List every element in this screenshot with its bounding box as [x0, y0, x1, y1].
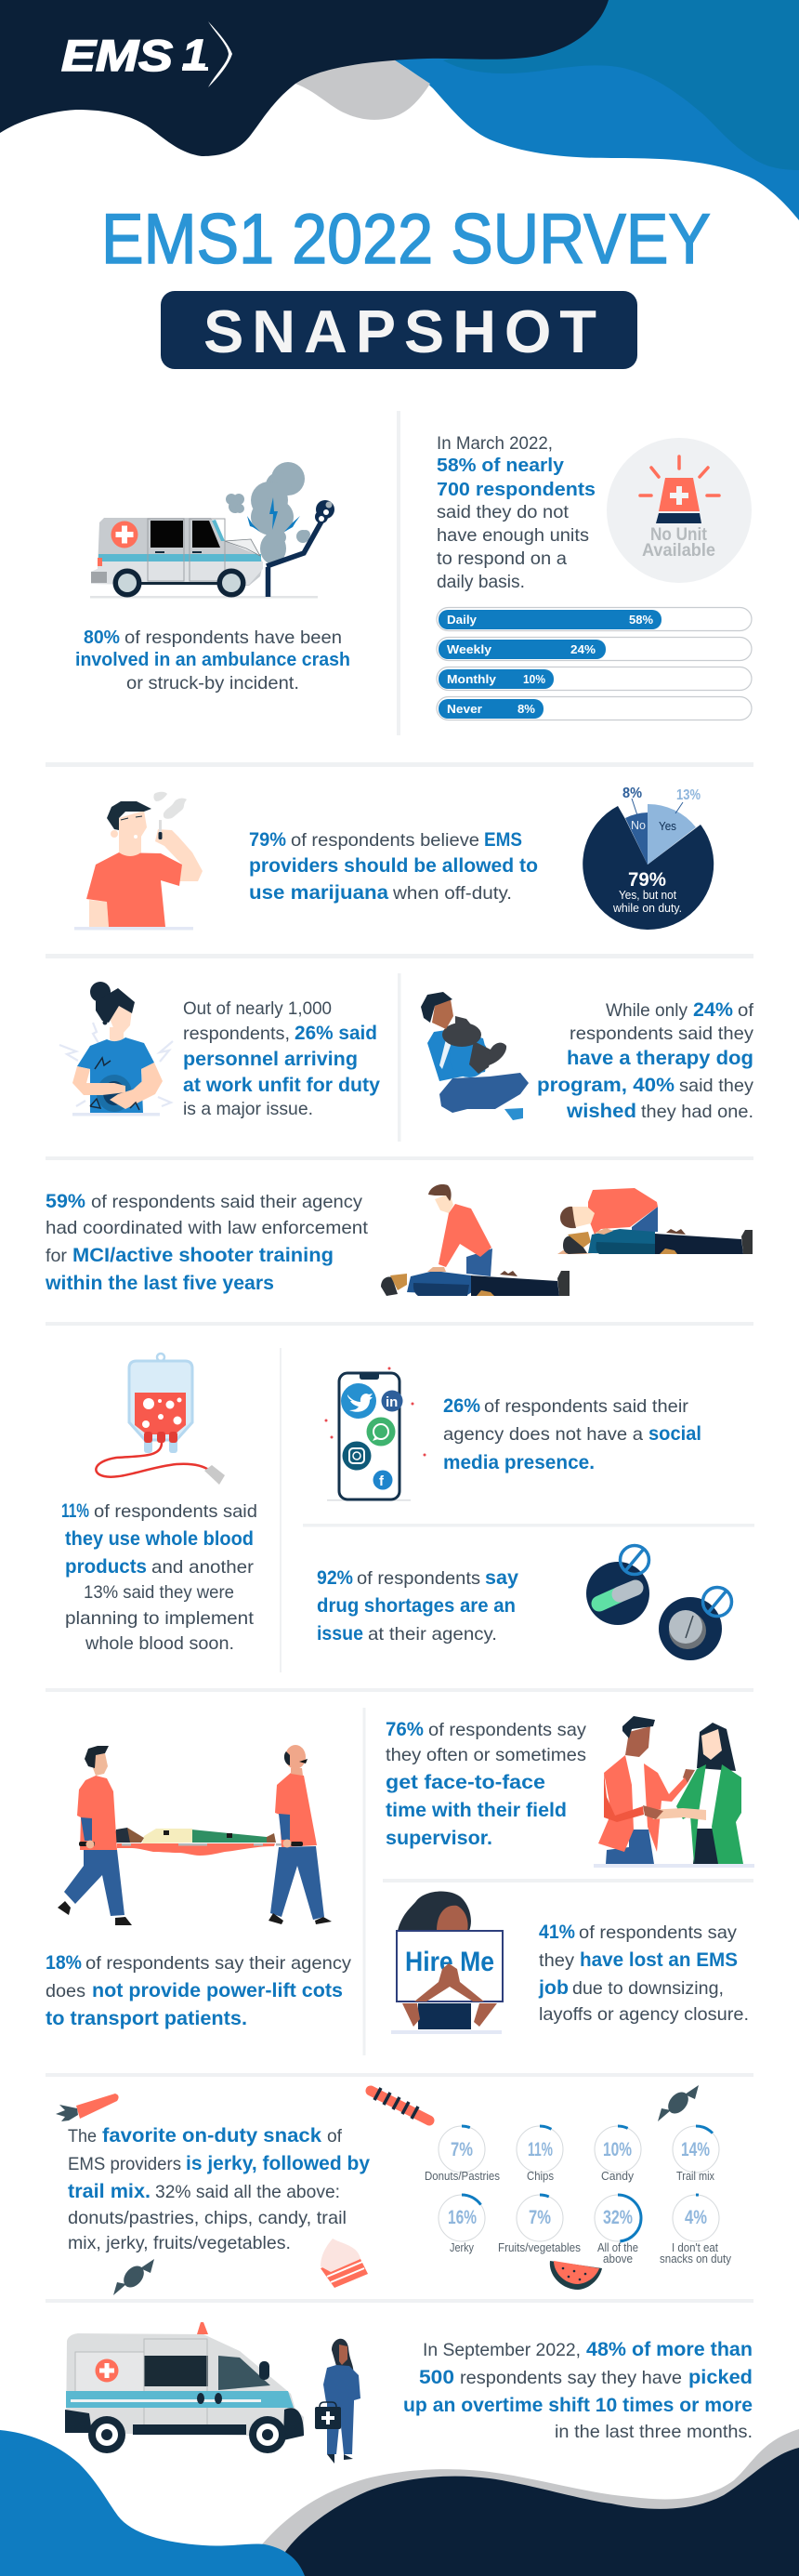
ring chart: snack percentages: 4%	[685, 2207, 707, 2228]
text: 26% social media: of respondents said their	[484, 1396, 689, 1417]
text: favorite on-duty snack: mix, jerky, fruits/vegetables.	[68, 2233, 291, 2253]
ring chart: snack percentages: 10%	[603, 2139, 632, 2160]
text: 26% social media: agency does not have a	[443, 1424, 643, 1445]
text: 59% training: had coordinated with law enforcement	[46, 1218, 369, 1238]
text: 18% power-lift cots: does	[46, 1981, 85, 2001]
icon: handshake between man and woman	[594, 1716, 754, 1868]
icon: siren no unit available	[607, 438, 752, 583]
text: 79% marijuana	[249, 828, 538, 904]
text: 58% not enough units: 58% of nearly	[437, 455, 565, 476]
ring chart: snack percentages	[425, 2126, 731, 2266]
ring chart: snack percentages: Chips	[527, 2169, 554, 2183]
text: 26% unfit for duty: at work unfit for duty	[183, 1074, 380, 1096]
ring chart: snack percentages: 32%	[603, 2207, 633, 2228]
icon: wrapped candy small	[113, 2259, 154, 2295]
text: 48% overtime: 48% of more than	[586, 2338, 753, 2360]
pie chart: marijuana opinions: 79%	[628, 869, 666, 891]
ring chart: snack percentages: 14%	[681, 2139, 710, 2160]
logo: EMS1	[61, 21, 232, 87]
text: 59% training: 59%	[46, 1190, 85, 1212]
bar: monthly: 10%	[523, 672, 545, 686]
pie chart: marijuana opinions	[583, 786, 714, 930]
text: favorite on-duty snack: donuts/pastries, chips, candy, trail	[68, 2208, 347, 2228]
icon: CPR chest compressions	[381, 1184, 570, 1296]
text: 92% drug shortages: 92%	[317, 1566, 353, 1589]
ring chart: snack percentages: Candy	[601, 2169, 634, 2183]
icon: woman with stomach ache	[59, 982, 173, 1116]
bar: weekly: Weekly	[447, 642, 492, 656]
text: 18% power-lift cots: to transport patients.	[46, 2007, 247, 2029]
icon: stretcher carried by two medics	[58, 1745, 332, 1925]
text: 11% whole blood: whole blood soon.	[85, 1633, 234, 1654]
icon: cake slice	[321, 2239, 368, 2288]
text: 11% whole blood: of respondents said	[94, 1501, 257, 1522]
text: 24% therapy dog: of	[738, 1000, 754, 1021]
text: favorite on-duty snack: is jerky, followed by	[186, 2152, 370, 2174]
icon: CPR rescue breaths	[557, 1188, 753, 1254]
icon: person smoking	[74, 792, 203, 930]
text: 11% whole blood: and another	[151, 1557, 255, 1578]
bar: daily: Daily	[447, 613, 478, 627]
text: 58% not enough units	[437, 434, 596, 592]
text: 79% marijuana: of respondents believe	[291, 830, 479, 851]
header wave background	[0, 0, 799, 220]
text: 48% overtime: respondents say they have	[460, 2368, 682, 2388]
text: 59% training	[45, 1190, 369, 1294]
text: 92% drug shortages: drug shortages are an	[317, 1594, 516, 1617]
text: 48% overtime: In September 2022,	[423, 2340, 581, 2360]
text: 24% therapy dog: 24%	[693, 998, 733, 1021]
text: 79% marijuana: EMS	[484, 828, 522, 851]
ring chart: snack percentages: 7%	[451, 2139, 473, 2160]
text: 48% overtime: 500	[419, 2366, 454, 2388]
panel: favorite snacks	[56, 2085, 731, 2295]
text: 24% therapy dog: wished	[566, 1100, 636, 1122]
text: 24% therapy dog: program, 40%	[537, 1074, 675, 1096]
panel: ambulance crash	[75, 462, 350, 694]
icon: hire me sign: Hire Me	[405, 1947, 494, 1977]
text: 58% not enough units: to respond on a	[437, 549, 567, 569]
text: 26% unfit for duty: is a major issue.	[183, 1099, 313, 1119]
text: 76% face-to-face: of respondents say	[428, 1720, 586, 1740]
text: 79% marijuana: use marijuana	[249, 881, 389, 904]
text: 41% lost job	[538, 1921, 749, 2025]
ring chart: snack percentages: Trail mix	[676, 2169, 714, 2183]
icon: capsule unavailable	[586, 1545, 649, 1625]
icon: siren no unit available: Available	[642, 541, 715, 561]
text: 92% drug shortages: say	[485, 1566, 518, 1589]
text: 92% drug shortages: issue	[317, 1622, 363, 1645]
text: 26% unfit for duty: personnel arriving	[183, 1048, 358, 1070]
pie chart: marijuana opinions: 13%	[676, 787, 701, 803]
icon: carrot	[56, 2094, 119, 2121]
panel: lost EMS job	[391, 1892, 749, 2034]
text: 41% lost job: layoffs or agency closure.	[539, 2004, 749, 2025]
text: favorite on-duty snack: The	[68, 2126, 97, 2147]
text: 11% whole blood: 11%	[61, 1499, 89, 1522]
icon: person hugging dog	[421, 992, 529, 1120]
icon: ambulance	[65, 2322, 304, 2453]
text: favorite on-duty snack: of	[327, 2126, 343, 2147]
icon: siren no unit available: No Unit	[650, 525, 708, 545]
text: 59% training: MCI/active shooter training	[72, 1244, 334, 1266]
panel: active shooter training	[45, 1184, 753, 1296]
text: 80% involved in a crash: of respondents have been	[124, 628, 342, 648]
panel: social media	[325, 1367, 701, 1500]
text: 59% training: of respondents said their agency	[91, 1192, 362, 1212]
text: 41% lost job: have lost an EMS	[580, 1949, 738, 1971]
text: 41% lost job: they	[539, 1950, 574, 1971]
subtitle badge: snapshot: SNAPSHOT	[203, 297, 596, 365]
text: favorite on-duty snack: favorite on-duty snack	[102, 2124, 321, 2147]
logo: EMS1: EMS	[61, 31, 173, 80]
text: 59% training: within the last five years	[45, 1272, 274, 1294]
text: 59% training: for	[46, 1246, 68, 1266]
panel: therapy dog	[421, 992, 754, 1122]
text: 80% involved in a crash	[75, 627, 350, 694]
text: 24% therapy dog: While only	[606, 1000, 688, 1021]
icon: watermelon slice	[550, 2261, 602, 2290]
text: 76% face-to-face: supervisor.	[386, 1827, 492, 1849]
text: 11% whole blood	[61, 1499, 257, 1654]
text: 79% marijuana: providers should be allowed to	[249, 854, 538, 877]
bar: daily: 58%	[629, 613, 653, 627]
ring chart: snack percentages: Jerky	[450, 2240, 474, 2254]
bar: never	[437, 697, 752, 720]
icon: crashed ambulance	[90, 462, 334, 599]
text: 18% power-lift cots: 18%	[46, 1951, 82, 1974]
text: 92% drug shortages: at their agency.	[368, 1624, 497, 1645]
panel: no unit available	[437, 434, 752, 720]
text: 11% whole blood: products	[65, 1555, 147, 1578]
text: 24% therapy dog: respondents said they	[570, 1024, 753, 1044]
text: 48% overtime: up an overtime shift 10 times or more	[403, 2394, 753, 2416]
ring chart: snack percentages: above	[603, 2252, 633, 2266]
icon: medic with bag	[315, 2339, 360, 2464]
bar: monthly	[437, 667, 752, 690]
text: 48% overtime: picked	[688, 2366, 753, 2388]
text: 76% face-to-face: 76%	[386, 1718, 424, 1740]
text: 26% unfit for duty: Out of nearly 1,000	[183, 998, 332, 1019]
text: 41% lost job: of respondents say	[579, 1922, 737, 1943]
bar: never: 8%	[517, 702, 535, 716]
ring chart: snack percentages: 7%	[529, 2207, 551, 2228]
icon: wrapped candy	[658, 2085, 699, 2121]
text: 18% power-lift cots: not provide power-lift cots	[92, 1979, 343, 2001]
icon: hire me sign	[391, 1892, 503, 2034]
text: 11% whole blood: planning to implement	[65, 1608, 255, 1629]
text: 48% overtime: in the last three months.	[555, 2422, 753, 2442]
text: favorite on-duty snack: 32% said all the above:	[155, 2182, 340, 2202]
icon: phone with social apps: f	[379, 1473, 385, 1489]
text: 26% social media: media presence.	[443, 1451, 595, 1473]
text: 26% social media: social	[648, 1422, 701, 1445]
text: 76% face-to-face: they often or sometimes	[386, 1745, 586, 1765]
text: favorite on-duty snack: trail mix.	[68, 2180, 151, 2202]
pie chart: marijuana opinions: Yes, but not	[619, 889, 676, 902]
text: 11% whole blood: they use whole blood	[65, 1527, 254, 1550]
ring chart: snack percentages: I don't eat	[672, 2240, 718, 2254]
pie chart: marijuana opinions: 8%	[622, 786, 642, 801]
text: 24% therapy dog: have a therapy dog	[567, 1047, 753, 1069]
text: 18% power-lift cots	[46, 1951, 351, 2029]
panel: drug shortages	[317, 1545, 732, 1660]
text: 48% overtime	[403, 2338, 753, 2442]
text: 11% whole blood: 13% said they were	[84, 1582, 234, 1603]
text: 26% unfit for duty	[183, 998, 380, 1119]
icon: IV blood bag	[96, 1354, 225, 1485]
footer wave background	[0, 2429, 799, 2576]
ring chart: snack percentages: 11%	[528, 2139, 553, 2160]
panel: marijuana	[74, 786, 714, 930]
text: 58% not enough units: daily basis.	[437, 573, 525, 592]
text: 80% involved in a crash: involved in an ambulance crash	[75, 649, 350, 670]
ring chart: snack percentages: 16%	[448, 2207, 477, 2228]
text: favorite on-duty snack	[68, 2124, 370, 2253]
icon: phone with social apps: in	[386, 1394, 398, 1410]
icon: candy stick	[371, 2088, 429, 2120]
pie chart: marijuana opinions: Yes	[659, 819, 676, 833]
text: 76% face-to-face: time with their field	[386, 1799, 567, 1821]
text: 58% not enough units: have enough units	[437, 526, 589, 546]
panel: whole blood	[61, 1354, 257, 1654]
ring chart: snack percentages: snacks on duty	[660, 2252, 731, 2266]
pie chart: marijuana opinions: No	[631, 818, 646, 832]
text: 80% involved in a crash: 80%	[84, 627, 120, 648]
bar chart: frequency of no units	[437, 608, 752, 720]
icon: phone with social apps	[325, 1367, 426, 1500]
bar: weekly	[437, 638, 752, 660]
text: 24% therapy dog: said they	[679, 1076, 753, 1096]
ring chart: snack percentages: Donuts/Pastries	[425, 2169, 500, 2183]
text: 26% unfit for duty: respondents,	[183, 1024, 290, 1044]
title: EMS1 2022 SURVEY	[101, 200, 711, 279]
panel: power-lift cots	[46, 1745, 351, 2029]
text: 76% face-to-face	[386, 1718, 586, 1849]
bar: daily	[437, 608, 752, 630]
panel: field supervisor	[386, 1716, 754, 1868]
text: 92% drug shortages	[317, 1566, 518, 1645]
panel: unfit for duty	[59, 982, 380, 1119]
text: 26% social media	[443, 1394, 701, 1473]
text: 79% marijuana: when off-duty.	[392, 883, 512, 904]
text: 92% drug shortages: of respondents	[357, 1568, 480, 1589]
ring chart: snack percentages: All of the	[597, 2240, 638, 2254]
text: 58% not enough units: 700 respondents	[437, 479, 596, 500]
text: 41% lost job: job	[538, 1976, 569, 1999]
text: 58% not enough units: In March 2022,	[437, 434, 553, 454]
bar: weekly: 24%	[570, 642, 596, 656]
bar: monthly: Monthly	[447, 672, 497, 686]
text: 80% involved in a crash: or struck-by incident.	[126, 674, 299, 694]
text: 41% lost job: 41%	[539, 1921, 575, 1943]
text: 26% social media: 26%	[443, 1394, 480, 1417]
text: 24% therapy dog: they had one.	[641, 1102, 753, 1122]
panel: overtime shifts	[65, 2322, 753, 2464]
text: 26% unfit for duty: 26% said	[295, 1022, 377, 1044]
text: 18% power-lift cots: of respondents say their agency	[85, 1953, 351, 1974]
text: favorite on-duty snack: EMS providers	[68, 2154, 181, 2174]
icon: tablet unavailable	[659, 1588, 732, 1660]
text: 79% marijuana: 79%	[249, 828, 286, 851]
pie chart: marijuana opinions: while on duty.	[612, 902, 682, 915]
bar: never: Never	[447, 702, 482, 716]
ring chart: snack percentages: Fruits/vegetables	[498, 2240, 581, 2254]
text: 24% therapy dog	[537, 998, 754, 1122]
text: 58% not enough units: said they do not	[437, 503, 570, 522]
logo: EMS1: 1	[182, 31, 207, 78]
text: 41% lost job: due to downsizing,	[572, 1978, 724, 1999]
text: 76% face-to-face: get face-to-face	[386, 1771, 545, 1793]
